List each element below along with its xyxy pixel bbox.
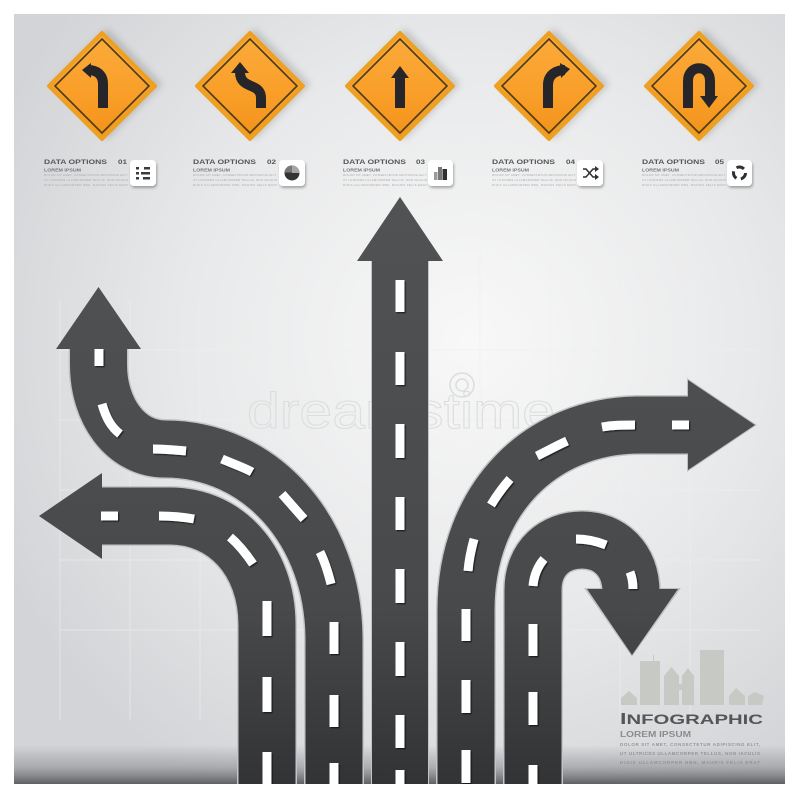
caption 03 [343,159,427,187]
infographic title block: INFOGRAPHIC [620,711,763,728]
road arrow: straight up [357,197,443,800]
caption 04: DATA OPTIONS [492,159,556,166]
icon tile 05: recycle [727,160,752,186]
icon tile 01: list [130,160,156,186]
infographic title block: UT ULTRICES ULLAMCORPER TELLUS, NON IACULIS [620,751,760,756]
caption 01: DIGIS ULLAMCORPER NBH, MAURIS FELIS ERAT [44,183,128,187]
caption 03: LOREM IPSUM [343,168,380,172]
icon tile 04: shuffle [577,160,603,186]
caption 01: 01 [118,159,127,166]
watermark [60,240,760,720]
caption 02: DOLOR SIT AMET, CONSECTETUR ADIPISCING ELIT, [193,173,277,177]
infographic title block [620,711,763,765]
caption 05 [642,159,726,187]
infographic title block: DOLOR SIT AMET, CONSECTETUR ADIPISCING ELIT, [620,742,760,747]
road arrow: U-turn [533,539,679,800]
caption 02 [193,159,277,187]
caption 04: DIGIS ULLAMCORPER NBH, MAURIS FELIS ERAT [492,183,576,187]
city skyline icon [621,650,764,705]
caption 04: LOREM IPSUM [492,168,529,172]
watermark: dreamstime [247,383,555,439]
caption 02: 02 [267,159,276,166]
lane dashes [99,349,334,795]
caption 02: DIGIS ULLAMCORPER NBH, MAURIS FELIS ERAT [193,183,277,187]
lane dashes [533,539,633,797]
caption 05: DATA OPTIONS [642,159,706,166]
caption 05: LOREM IPSUM [642,168,679,172]
caption 01: UT ULTRICES ULLAMCORPER TELLUS, NON IACULIS [44,178,128,182]
caption 01 [44,159,128,187]
warning sign 4: curve right [496,33,602,139]
caption 05: 05 [715,159,724,166]
road arrow: curving left [39,473,267,800]
warning sign 5: U-turn [646,33,752,139]
lane dashes [396,280,404,795]
caption 04: UT ULTRICES ULLAMCORPER TELLUS, NON IACULIS [492,178,576,182]
caption 03: 03 [416,159,425,166]
caption 03: DOLOR SIT AMET, CONSECTETUR ADIPISCING ELIT, [343,173,427,177]
caption 03: DIGIS ULLAMCORPER NBH, MAURIS FELIS ERAT [343,183,427,187]
lane dashes [101,516,267,787]
caption 04: 04 [566,159,575,166]
caption 03: UT ULTRICES ULLAMCORPER TELLUS, NON IACULIS [343,178,427,182]
caption 04 [492,159,576,187]
icon tile 02: pie chart [279,160,305,186]
caption 05: UT ULTRICES ULLAMCORPER TELLUS, NON IACULIS [642,178,726,182]
warning sign 1: curve left [49,33,155,139]
caption 03: DATA OPTIONS [343,159,407,166]
lane dashes [466,425,689,783]
caption 01: DATA OPTIONS [44,159,108,166]
road arrow: curving right [466,380,755,800]
caption 05: DOLOR SIT AMET, CONSECTETUR ADIPISCING ELIT, [642,173,726,177]
icon tile 03: bar chart [428,160,453,186]
caption 02: LOREM IPSUM [193,168,230,172]
caption 04: DOLOR SIT AMET, CONSECTETUR ADIPISCING ELIT, [492,173,576,177]
caption 02: UT ULTRICES ULLAMCORPER TELLUS, NON IACULIS [193,178,277,182]
warning sign 3: straight ahead [347,33,453,139]
caption 02: DATA OPTIONS [193,159,257,166]
warning sign 2: winding road [197,33,303,139]
caption 01: LOREM IPSUM [44,168,81,172]
road arrow: curving up and left [56,287,334,800]
infographic title block: DIGIS ULLAMCORPER NBH, MAURIS FELIS ERAT [620,760,760,765]
caption 05: DIGIS ULLAMCORPER NBH, MAURIS FELIS ERAT [642,183,726,187]
caption 01: DOLOR SIT AMET, CONSECTETUR ADIPISCING ELIT, [44,173,128,177]
infographic title block: LOREM IPSUM [620,730,691,739]
